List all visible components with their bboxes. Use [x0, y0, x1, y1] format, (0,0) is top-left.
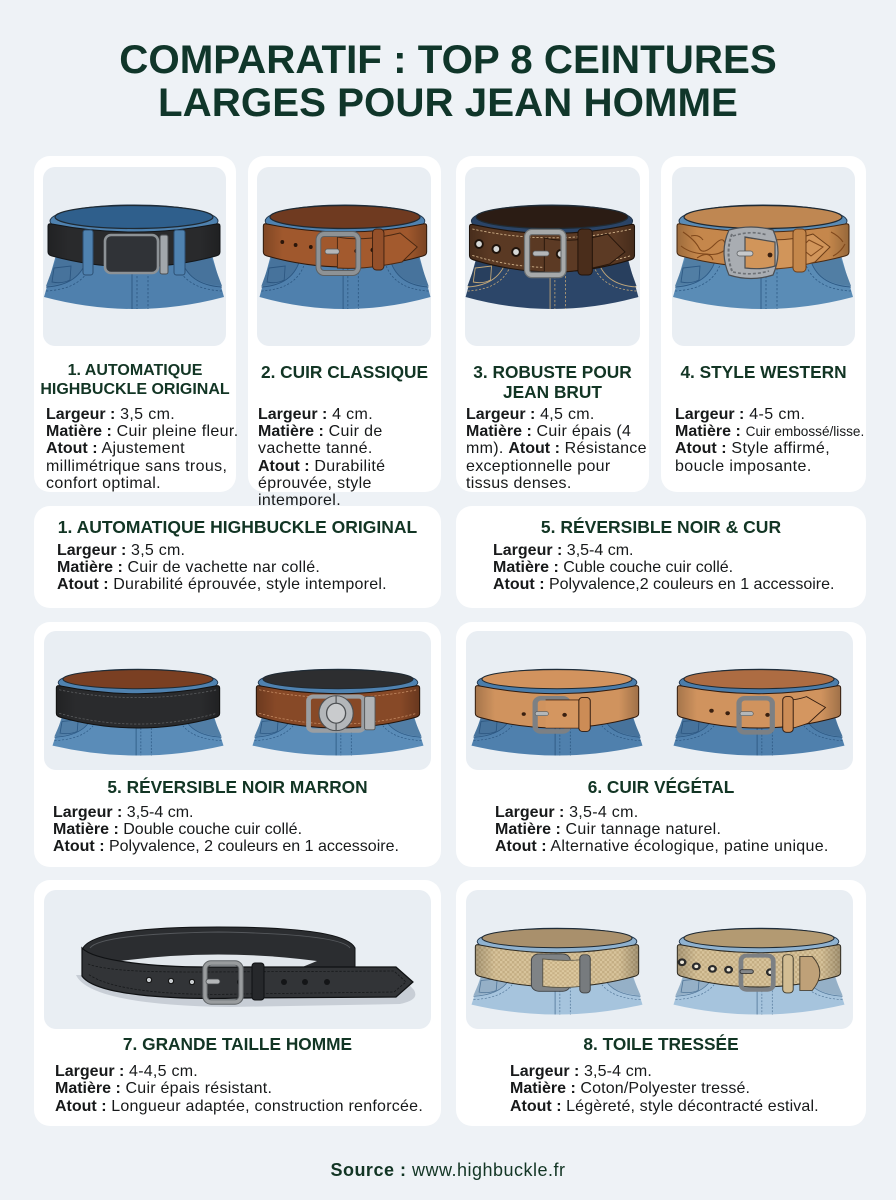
specs: Atout : Durabilité: [258, 458, 385, 475]
specs: Largeur : 3,5 cm.: [57, 542, 185, 559]
title: LARGES POUR JEAN HOMME: [158, 80, 738, 124]
title: COMPARATIF : TOP 8 CEINTURES: [119, 37, 777, 82]
specs: [258, 406, 385, 509]
illustration: two reversible belts on jeans: [44, 631, 431, 770]
heading: 4. STYLE WESTERN: [680, 362, 847, 382]
specs: Atout : Polyvalence, 2 couleurs en 1 accessoire.: [53, 838, 399, 855]
heading: HIGHBUCKLE ORIGINAL: [40, 380, 230, 398]
heading: 3. ROBUSTE POUR: [473, 362, 632, 382]
specs: mm). Atout : Résistance: [466, 440, 647, 457]
heading: [40, 362, 230, 398]
heading: JEAN BRUT: [503, 382, 602, 402]
heading: 6. CUIR VÉGÉTAL: [588, 777, 734, 797]
title: [119, 37, 777, 124]
specs: Atout : Ajustement: [46, 440, 185, 457]
panel: summary 5 reversible: [456, 506, 866, 608]
specs: Atout : Durabilité éprouvée, style intemporel.: [57, 576, 387, 593]
panel: 5. reversible noir marron: [34, 622, 441, 867]
specs: Matière : Cuir pleine fleur.: [46, 423, 239, 440]
specs: [495, 804, 829, 855]
specs: [46, 406, 239, 492]
specs: Matière : Cuir embossé/lisse.: [675, 423, 864, 440]
panel: 2. cuir classique: [248, 156, 441, 492]
specs: [55, 1062, 423, 1114]
specs: Matière : Double couche cuir collé.: [53, 821, 302, 838]
specs: Largeur : 3,5-4 cm.: [53, 804, 193, 821]
specs: Matière : Cuir tannage naturel.: [495, 821, 721, 838]
heading: 2. CUIR CLASSIQUE: [261, 362, 428, 382]
specs: Atout : Style affirmé,: [675, 440, 830, 457]
specs: Matière : Cuir de vachette nar collé.: [57, 559, 320, 576]
specs: Atout : Légèreté, style décontracté estival.: [510, 1098, 819, 1114]
specs: exceptionnelle pour: [466, 458, 610, 475]
heading: 8. TOILE TRESSÉE: [583, 1034, 739, 1054]
panel: 3. robuste pour jean brut: [456, 156, 649, 492]
specs: [510, 1062, 819, 1114]
specs: Atout : Alternative écologique, patine unique.: [495, 838, 829, 855]
illustration: dark brown thick belt on raw denim: [465, 167, 640, 346]
illustration: black automatic belt on jeans: [43, 167, 226, 346]
specs: Atout : Longueur adaptée, construction renforcée.: [55, 1098, 423, 1114]
specs: [493, 542, 834, 593]
specs: Largeur : 3,5 cm.: [46, 406, 175, 423]
illustration: brown classic belt on jeans: [257, 167, 431, 346]
specs: Matière : Coton/Polyester tressé.: [510, 1080, 750, 1097]
heading: 7. GRANDE TAILLE HOMME: [123, 1034, 352, 1054]
specs: Largeur : 4 cm.: [258, 406, 373, 423]
specs: Largeur : 4-4,5 cm.: [55, 1062, 198, 1080]
heading: 5. RÉVERSIBLE NOIR MARRON: [107, 777, 368, 797]
specs: boucle imposante.: [675, 458, 812, 475]
specs: éprouvée, style: [258, 475, 372, 492]
specs: millimétrique sans trous,: [46, 458, 227, 475]
specs: [675, 406, 864, 475]
specs: Matière : Cuble couche cuir collé.: [493, 559, 733, 576]
specs: Largeur : 4,5 cm.: [466, 406, 595, 423]
panel: 4. style western: [661, 156, 866, 492]
specs: [466, 406, 647, 492]
heading: 1. AUTOMATIQUE HIGHBUCKLE ORIGINAL: [58, 517, 417, 537]
specs: Largeur : 3,5-4 cm.: [495, 804, 638, 821]
specs: Matière : Cuir de: [258, 423, 383, 440]
illustration: two woven canvas belts on light jeans: [466, 890, 853, 1029]
panel: 6. cuir vegetal: [456, 622, 866, 867]
panel: summary 1 automatique: [34, 506, 441, 608]
heading: 1. AUTOMATIQUE: [68, 362, 202, 379]
heading: 5. RÉVERSIBLE NOIR & CUR: [541, 517, 781, 537]
illustration: long open black belt: [44, 890, 431, 1029]
specs: vachette tanné.: [258, 440, 373, 457]
heading: [473, 362, 632, 402]
source footer: Source : www.highbuckle.fr: [330, 1160, 566, 1180]
specs: Largeur : 3,5-4 cm.: [510, 1062, 652, 1080]
specs: Matière : Cuir épais résistant.: [55, 1080, 272, 1097]
panel: 7. grande taille homme: [34, 880, 441, 1126]
specs: tissus denses.: [466, 475, 572, 492]
specs: Largeur : 4-5 cm.: [675, 406, 805, 423]
illustration: two tan vegetable-tanned belts on jeans: [466, 631, 853, 770]
specs: [53, 804, 399, 855]
specs: Largeur : 3,5-4 cm.: [493, 542, 633, 559]
specs: confort optimal.: [46, 475, 161, 492]
panel: 1. automatique highbuckle original: [34, 156, 236, 492]
specs: [57, 542, 387, 593]
specs: Atout : Polyvalence,2 couleurs en 1 accessoire.: [493, 576, 834, 593]
specs: intemporel.: [258, 492, 341, 509]
specs: Matière : Cuir épais (4: [466, 423, 631, 440]
illustration: tooled western belt with silver buckle: [672, 167, 855, 346]
panel: 8. toile tressee: [456, 880, 866, 1126]
